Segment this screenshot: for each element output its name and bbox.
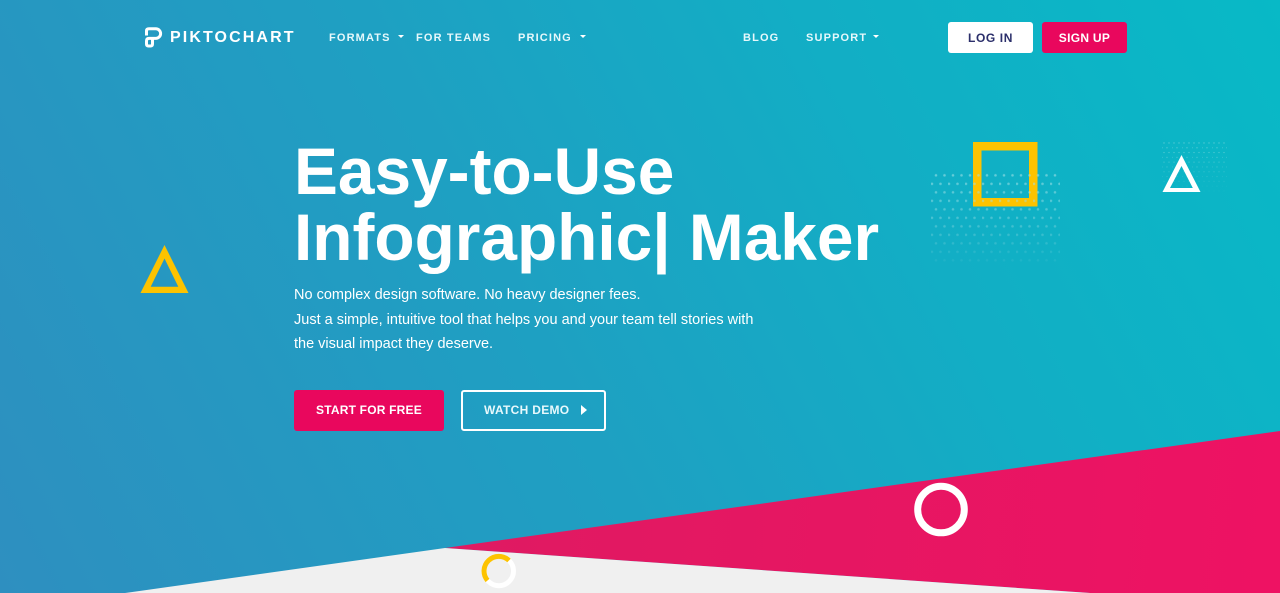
log in button: [948, 22, 1033, 53]
nav: blog: BLOG: [743, 32, 779, 44]
icon: play arrow: [581, 405, 587, 415]
yellow square outline: [977, 146, 1033, 202]
icon: pricing caret: [580, 35, 586, 38]
logo wordmark: PIKTOCHART: [170, 29, 296, 46]
icon: support caret: [873, 35, 879, 38]
background shapes and decorations: [125, 142, 1280, 593]
nav: support: SUPPORT: [806, 32, 867, 44]
headline: Infographic| Maker: [294, 200, 879, 274]
log in button: LOG IN: [968, 31, 1013, 45]
headline: Easy-to-Use: [294, 134, 674, 208]
start for free button: [294, 390, 444, 431]
start for free button: START FOR FREE: [316, 403, 422, 417]
description: [294, 287, 753, 352]
light grey wedge: [125, 548, 1090, 593]
logo: [145, 27, 296, 48]
yellow triangle outline: [140, 245, 188, 293]
white ring on pink wedge: [918, 486, 964, 533]
description: Just a simple, intuitive tool that helps you and your team tell stories with: [294, 312, 753, 328]
nav: formats: FORMATS: [329, 32, 391, 44]
sign up button: SIGN UP: [1059, 31, 1110, 45]
watch demo button: [461, 390, 606, 431]
logo icon: [145, 27, 162, 48]
headline: [294, 134, 879, 274]
dot pattern behind triangle: [1161, 140, 1227, 192]
dot pattern over square: [930, 173, 1060, 263]
pink wedge: [445, 431, 1280, 593]
icon: formats caret: [398, 35, 404, 38]
white triangle outline: [1162, 155, 1200, 192]
watch demo button: WATCH DEMO: [484, 403, 569, 417]
two-tone ring: [484, 556, 514, 586]
nav: pricing: PRICING: [518, 32, 572, 44]
description: No complex design software. No heavy designer fees.: [294, 287, 641, 303]
nav: for teams: FOR TEAMS: [416, 32, 491, 44]
description: the visual impact they deserve.: [294, 336, 493, 352]
sign up button: [1042, 22, 1127, 53]
